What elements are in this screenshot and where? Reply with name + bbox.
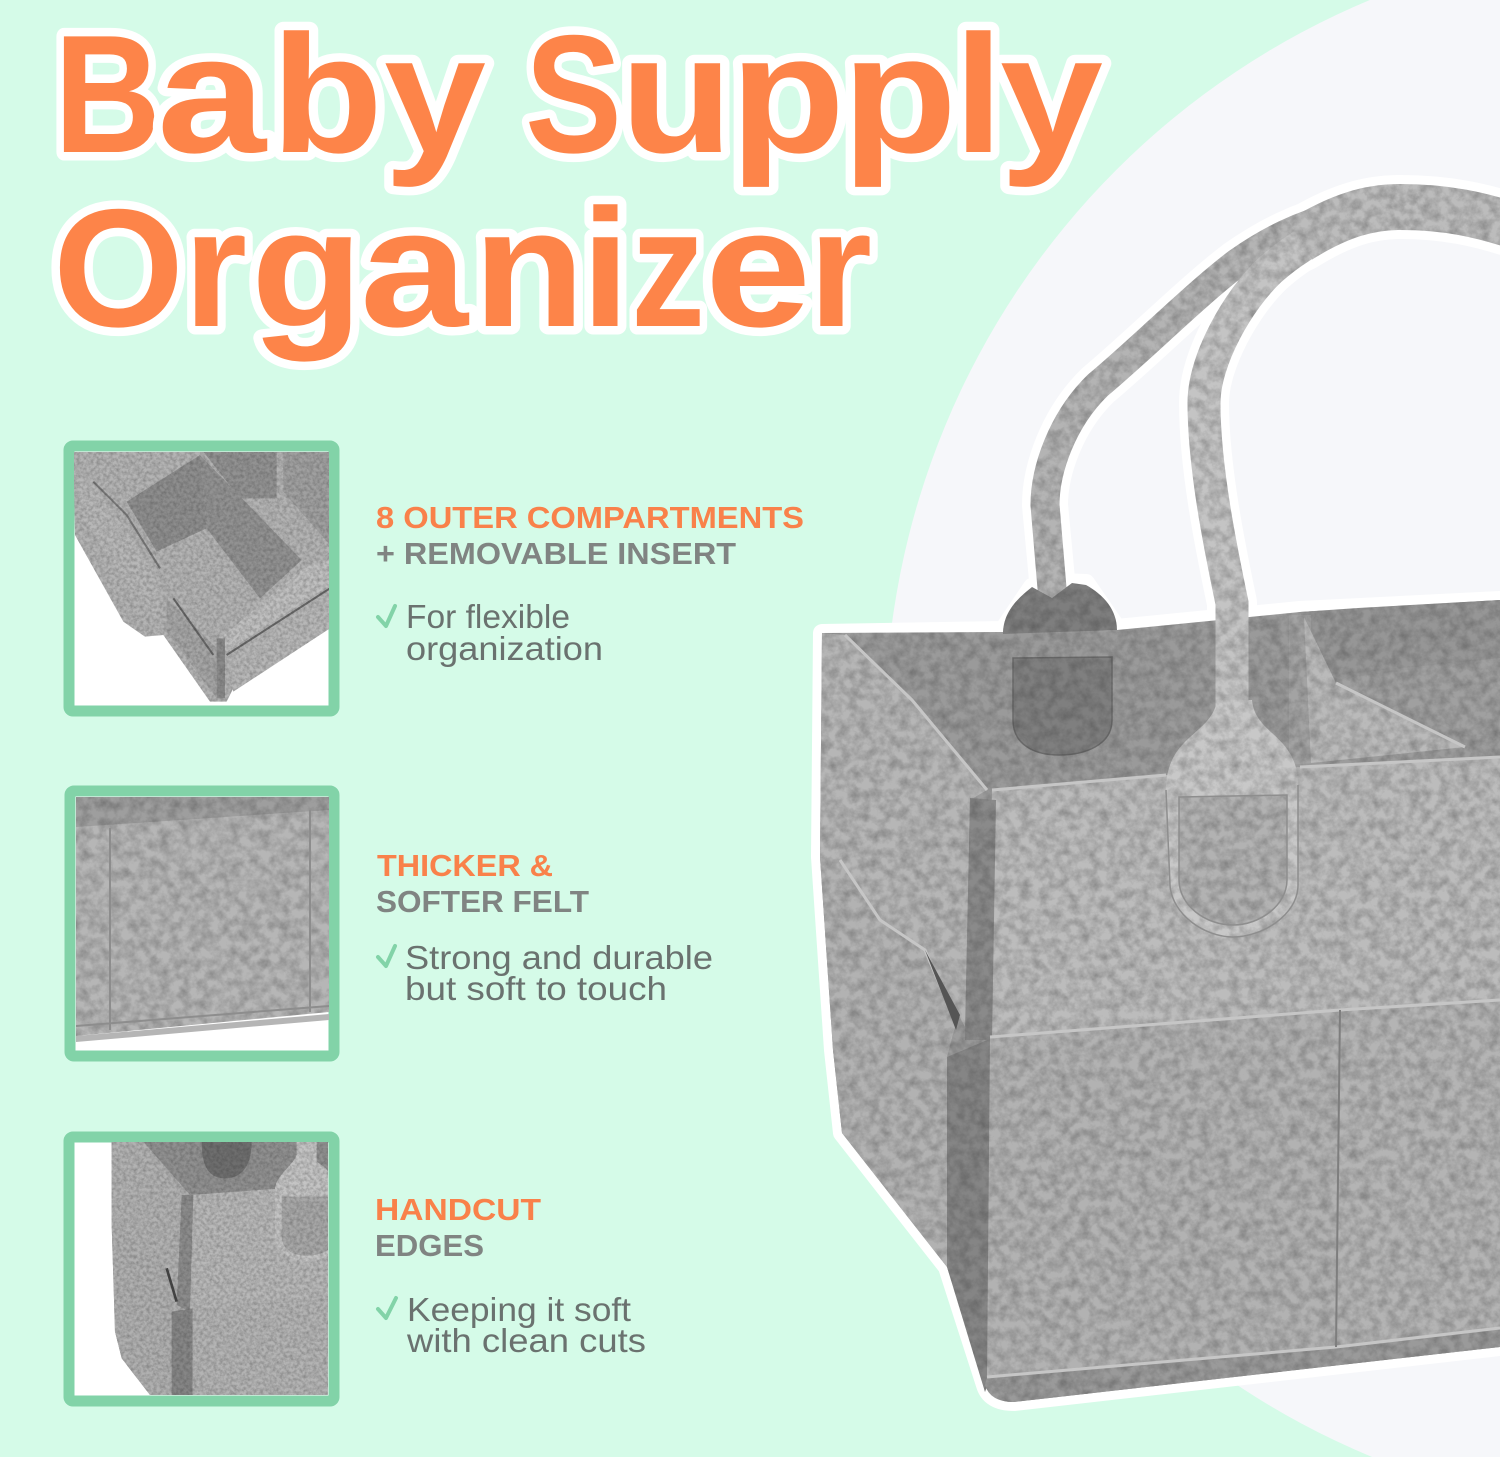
- body text: Strong and durable: [405, 939, 713, 976]
- body text: For flexible: [406, 598, 570, 635]
- title line 1: y: [1000, 0, 1103, 188]
- lower seam: [947, 1038, 992, 1392]
- check icon: [378, 946, 395, 966]
- side pocket: [820, 857, 956, 1267]
- title line 2: a: [360, 174, 470, 362]
- body text: but soft to touch: [405, 970, 667, 1007]
- check icon: [378, 606, 395, 626]
- title line 1: y: [384, 0, 486, 188]
- heading: + REMOVABLE INSERT: [376, 536, 736, 571]
- bottom rim: [985, 1328, 1500, 1402]
- background circle: [885, 0, 1500, 1457]
- title line 1: l: [954, 0, 1003, 188]
- felt edge highlights: [840, 635, 1500, 1377]
- left front pocket: [987, 1010, 1340, 1377]
- pocket divider: [1336, 1010, 1340, 1347]
- heading: HANDCUT: [375, 1192, 541, 1227]
- heading: THICKER &: [377, 848, 553, 883]
- title: [53, 0, 1103, 362]
- right back wall: [1300, 600, 1500, 683]
- body text: [406, 598, 603, 667]
- base silhouette: [820, 600, 1500, 1402]
- thumbnail: compartments: [69, 446, 334, 711]
- check icon: [378, 1298, 396, 1318]
- title line 2: O: [53, 174, 184, 362]
- front handle: [1204, 225, 1340, 725]
- handle top band: [1300, 207, 1500, 240]
- title line 2: r: [809, 174, 872, 362]
- body text: with clean cuts: [406, 1322, 646, 1359]
- heading: 8 OUTER COMPARTMENTS: [376, 500, 804, 535]
- right front pocket: [1336, 1000, 1500, 1347]
- body text: Keeping it soft: [407, 1291, 631, 1328]
- heading: SOFTER FELT: [376, 884, 589, 919]
- panel: edges feature: [69, 1137, 646, 1401]
- white cutout outline: [820, 207, 1500, 1402]
- bag felt body: [820, 207, 1500, 1402]
- title line 1: S: [525, 0, 622, 188]
- title line 2: n: [473, 174, 585, 362]
- panel: compartments feature: [69, 446, 804, 711]
- title line 1: u: [620, 0, 733, 188]
- insert wedge: [1304, 617, 1465, 763]
- title line 2: z: [631, 174, 705, 362]
- left side panel: [820, 633, 987, 1027]
- title line 2: g: [251, 174, 363, 362]
- divider strip: [1289, 615, 1311, 765]
- back handle: [1045, 215, 1340, 600]
- body text: organization: [406, 630, 603, 667]
- title line 2: e: [705, 174, 811, 362]
- title line 1: B: [54, 0, 161, 188]
- handle tab patch: [1179, 795, 1287, 925]
- body text: [406, 1291, 646, 1359]
- side pocket slot: [925, 950, 960, 1030]
- title line 1: b: [271, 0, 383, 188]
- title line 1: a: [157, 0, 268, 188]
- inner stitched tab: [1013, 657, 1112, 755]
- thumbnail: felt: [70, 791, 334, 1056]
- handle tab stitching: [1166, 785, 1298, 937]
- panel: felt feature: [70, 791, 713, 1056]
- front handle tab: [1166, 700, 1298, 937]
- product photo: felt caddy: [820, 207, 1500, 1402]
- title line 2: r: [184, 174, 247, 362]
- heading: [375, 1192, 541, 1263]
- back handle tab: [1003, 583, 1117, 634]
- heading: [376, 848, 589, 919]
- inner back wall: [858, 612, 1300, 790]
- far compartment: [1336, 658, 1500, 737]
- side seam: [965, 798, 996, 1040]
- heading: EDGES: [375, 1228, 484, 1263]
- thumbnail: edges: [69, 1137, 334, 1401]
- title line 1: p: [842, 0, 957, 188]
- upper front panel: [990, 757, 1500, 1037]
- body text: [405, 939, 713, 1007]
- title line 1: p: [730, 0, 845, 188]
- heading: [376, 500, 804, 571]
- title line 2: i: [581, 174, 630, 362]
